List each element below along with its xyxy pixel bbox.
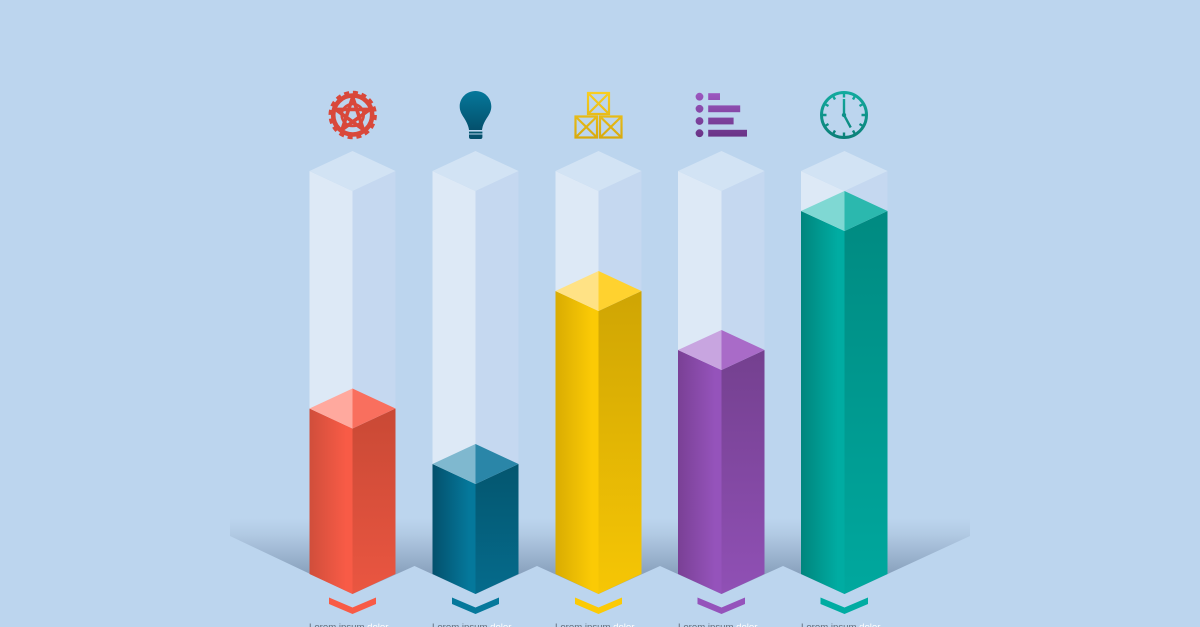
- icon: list: [696, 93, 747, 137]
- glass column 1: [310, 151, 396, 574]
- glass column 5: [801, 151, 888, 574]
- bar 1: red: [310, 388, 396, 594]
- icon: stacked boxes: [576, 93, 622, 138]
- icon: gear: [330, 93, 375, 137]
- chevron 1: [329, 598, 376, 614]
- glass column 3: [556, 151, 642, 574]
- chevron 2: [452, 598, 499, 614]
- icon: light bulb: [460, 91, 491, 139]
- floor shadow: [230, 518, 970, 594]
- glass column 2: [432, 151, 518, 574]
- glass column 4: [678, 151, 764, 574]
- bar 2: blue: [432, 444, 518, 594]
- icon: clock: [821, 92, 867, 138]
- chevron 4: [698, 598, 745, 614]
- bar 5: teal: [801, 191, 888, 594]
- chevron 5: [820, 598, 868, 614]
- bar 3: yellow: [556, 271, 642, 594]
- chevron 3: [575, 598, 622, 614]
- bar 4: purple: [678, 330, 764, 594]
